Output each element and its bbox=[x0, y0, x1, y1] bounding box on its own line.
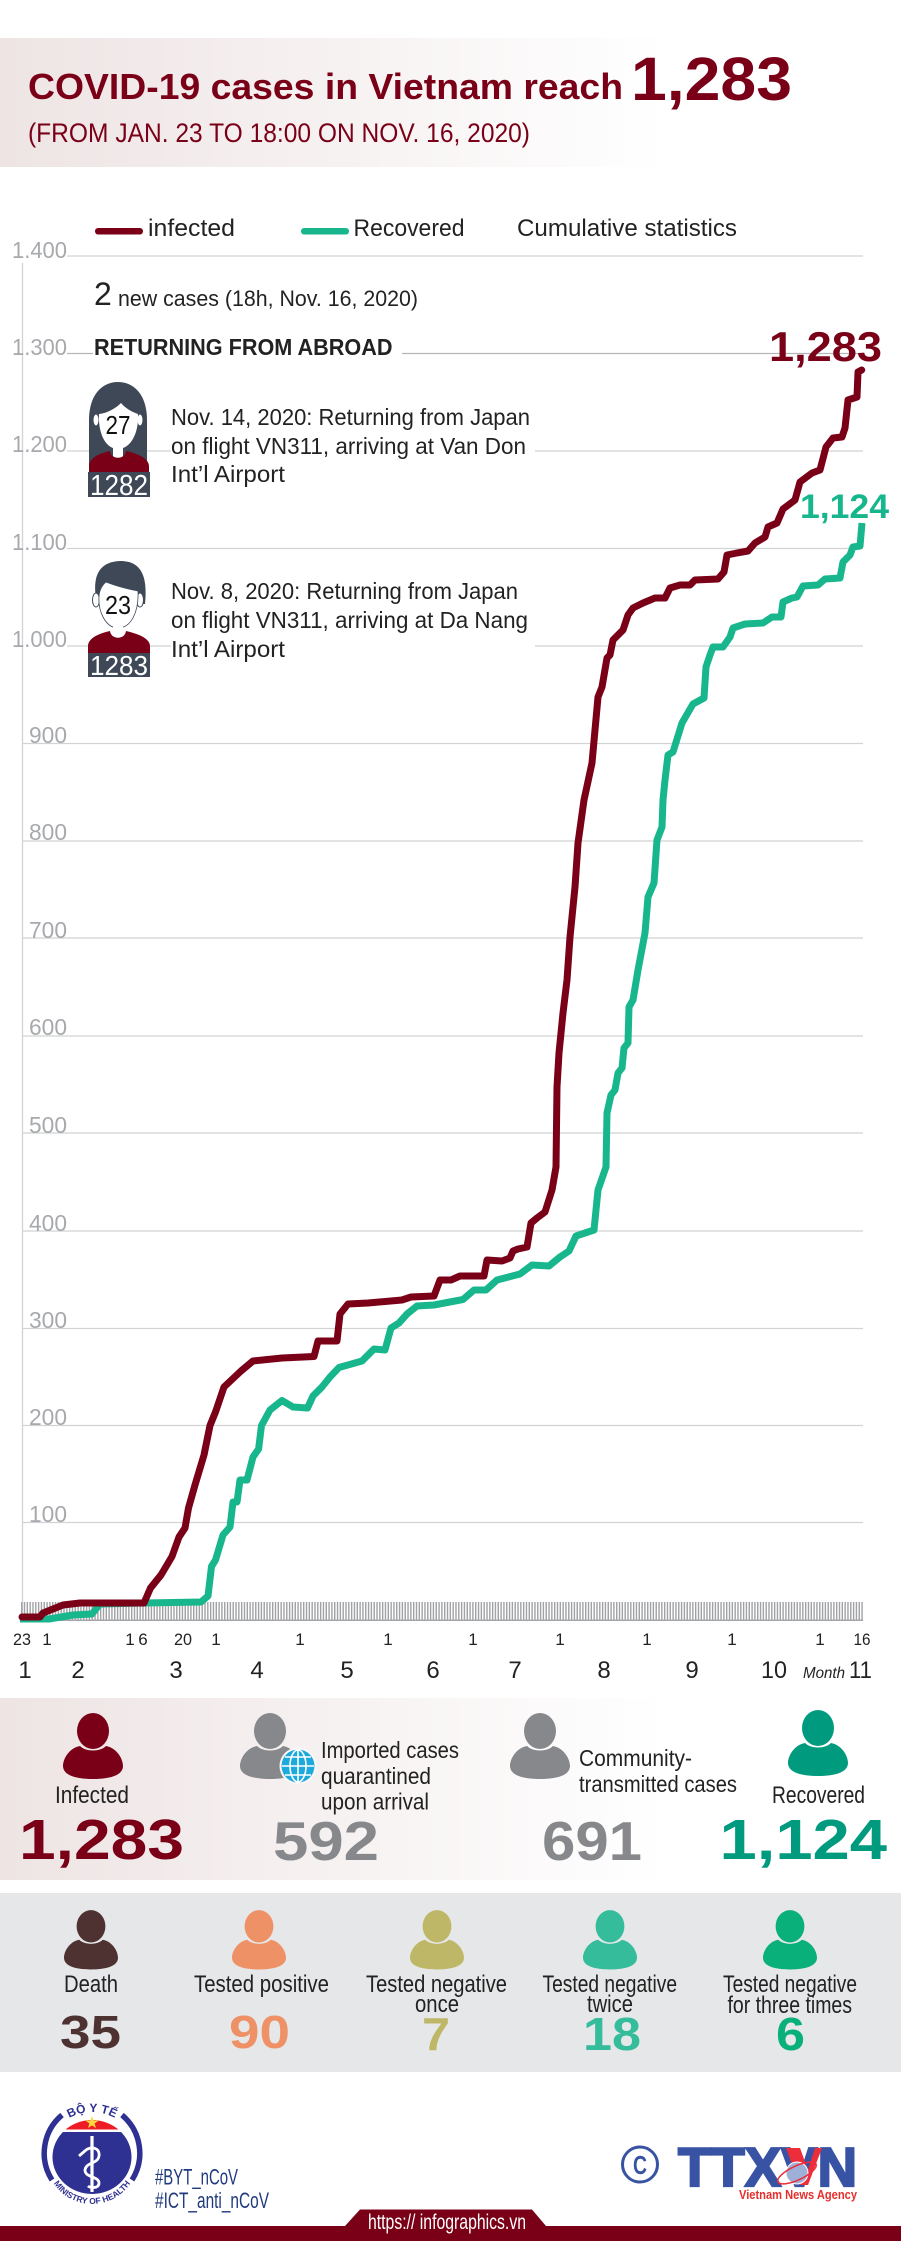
y axis labels: 600 bbox=[29, 1014, 67, 1040]
y axis labels: 500 bbox=[29, 1112, 67, 1138]
stat: tested negative twice: Tested negative bbox=[542, 1971, 677, 1998]
stat: tested negative once: once bbox=[415, 1991, 459, 2018]
hashtags: #ICT_anti_nCoV bbox=[155, 2188, 269, 2213]
section heading: returning from abroad: RETURNING FROM ABROAD bbox=[94, 334, 392, 360]
stat: tested negative three times: for three times bbox=[728, 1992, 852, 2019]
chart grid bbox=[22, 256, 863, 1620]
logo: TTXVN Vietnam News Agency: C bbox=[633, 2150, 647, 2180]
day tick labels: 20 bbox=[174, 1630, 192, 1649]
legend bbox=[95, 215, 737, 242]
day tick labels: 1 bbox=[642, 1630, 652, 1649]
stat: recovered: 1,124 bbox=[720, 1808, 887, 1872]
infected end value: 1,283 bbox=[769, 323, 882, 370]
y axis labels: 300 bbox=[29, 1307, 67, 1333]
y axis labels bbox=[12, 237, 67, 1527]
stat: infected: Infected bbox=[55, 1782, 129, 1809]
icon: patient 1283 bbox=[88, 561, 150, 681]
stat: imported cases: 592 bbox=[273, 1810, 379, 1872]
case 1283 description: Nov. 8, 2020: Returning from Japan bbox=[171, 578, 518, 604]
stat: imported cases: quarantined bbox=[321, 1763, 431, 1789]
stat: community cases: 691 bbox=[542, 1810, 642, 1872]
day tick labels: 1 bbox=[383, 1630, 393, 1649]
day tick labels: 1 bbox=[815, 1630, 825, 1649]
stat: tested negative once bbox=[366, 1910, 507, 2060]
icon: globe bbox=[280, 1748, 316, 1784]
y axis labels: 400 bbox=[29, 1210, 67, 1236]
legend: infected bbox=[148, 215, 235, 242]
hashtags: #BYT_nCoV bbox=[155, 2164, 238, 2190]
stat: recovered bbox=[720, 1710, 887, 1872]
day tick labels: 23 bbox=[13, 1630, 31, 1649]
stat: tested positive bbox=[194, 1910, 329, 2058]
y axis labels: 1.100 bbox=[12, 529, 67, 555]
y axis labels: 800 bbox=[29, 819, 67, 845]
month labels: Month bbox=[803, 1665, 845, 1682]
logo: Ministry of Health: MINISTRY OF HEALTH bbox=[54, 2180, 130, 2204]
stat: infected: 1,283 bbox=[19, 1808, 184, 1872]
stat: death: Death bbox=[64, 1971, 118, 1998]
header banner bbox=[0, 38, 901, 167]
title number: 1,283 bbox=[631, 45, 792, 113]
month labels: 11 bbox=[849, 1657, 872, 1684]
stat: imported cases: Imported cases bbox=[321, 1737, 459, 1763]
day tick labels bbox=[13, 1630, 870, 1649]
daily tick strip bbox=[21, 1602, 863, 1621]
month labels: 10 bbox=[761, 1657, 787, 1684]
stat: tested negative once: 7 bbox=[422, 2008, 450, 2060]
stat: tested negative twice bbox=[542, 1910, 677, 2060]
logo: Ministry of Health: BỘ Y TẾ bbox=[66, 2102, 119, 2118]
recovered line bbox=[20, 523, 862, 1619]
day tick labels: 16 bbox=[854, 1630, 870, 1649]
new cases note: 2 bbox=[94, 276, 112, 312]
day tick labels: 1 bbox=[42, 1630, 52, 1649]
stat: tested negative three times: Tested negative bbox=[723, 1971, 857, 1998]
panel: breakdown bbox=[0, 1893, 901, 2072]
month labels: 7 bbox=[508, 1657, 522, 1684]
footer bar: https:// infographics.vn bbox=[368, 2211, 526, 2234]
icon: patient 1283: 1283 bbox=[90, 650, 148, 681]
day tick labels: 1 bbox=[555, 1630, 565, 1649]
legend: Recovered bbox=[354, 215, 464, 242]
case 1283 description: on flight VN311, arriving at Da Nang bbox=[171, 607, 528, 633]
stat: imported cases bbox=[240, 1713, 459, 1872]
recovered end value: 1,124 bbox=[800, 488, 889, 526]
logo: TTXVN Vietnam News Agency: TTXVN bbox=[678, 2136, 857, 2198]
logo: Ministry of Health bbox=[41, 2102, 143, 2204]
logo: TTXVN Vietnam News Agency: Vietnam News Agency bbox=[739, 2187, 858, 2202]
new cases note bbox=[94, 276, 418, 312]
month labels: 8 bbox=[597, 1657, 611, 1684]
case 1283 description bbox=[171, 578, 528, 662]
y axis labels: 1.400 bbox=[12, 237, 67, 263]
icon: patient 1282 bbox=[88, 382, 150, 502]
stat: community cases bbox=[510, 1713, 737, 1872]
line chart bbox=[12, 237, 889, 1684]
y axis labels: 200 bbox=[29, 1404, 67, 1430]
icon: patient 1282: 27 bbox=[106, 410, 130, 440]
y axis labels: 1.300 bbox=[12, 334, 67, 360]
month labels: 1 bbox=[18, 1657, 32, 1684]
y axis labels: 100 bbox=[29, 1501, 67, 1527]
month labels: 6 bbox=[426, 1657, 440, 1684]
stat: tested negative twice: 18 bbox=[583, 2008, 641, 2060]
month labels: 3 bbox=[169, 1657, 183, 1684]
panel: main totals bbox=[0, 1698, 901, 1880]
stat: tested negative twice: twice bbox=[587, 1991, 633, 2018]
new cases note: new cases (18h, Nov. 16, 2020) bbox=[118, 286, 418, 311]
stat: imported cases: upon arrival bbox=[321, 1788, 429, 1814]
stat: recovered: Recovered bbox=[772, 1782, 865, 1809]
month labels: 4 bbox=[250, 1657, 264, 1684]
stat: tested negative once: Tested negative bbox=[366, 1971, 507, 1998]
y axis labels: 1.000 bbox=[12, 626, 67, 652]
day tick labels: 1 bbox=[468, 1630, 478, 1649]
day tick labels: 1 bbox=[125, 1630, 135, 1649]
legend: Cumulative statistics bbox=[517, 215, 737, 242]
month labels: 9 bbox=[685, 1657, 699, 1684]
day tick labels: 1 bbox=[295, 1630, 305, 1649]
day tick labels: 6 bbox=[138, 1630, 148, 1649]
title: COVID-19 cases in Vietnam reach bbox=[28, 66, 623, 107]
case 1282 description bbox=[171, 404, 530, 487]
month labels: 5 bbox=[340, 1657, 354, 1684]
day tick labels: 1 bbox=[211, 1630, 221, 1649]
icon: patient 1282: 1282 bbox=[90, 470, 148, 502]
stat: infected bbox=[19, 1713, 184, 1872]
stat: tested positive: 90 bbox=[229, 2006, 290, 2058]
stat: community cases: Community- bbox=[579, 1745, 692, 1771]
y axis labels: 700 bbox=[29, 917, 67, 943]
stat: tested negative three times: 6 bbox=[776, 2008, 805, 2060]
icon: patient 1283: 23 bbox=[105, 590, 131, 620]
subtitle: (FROM JAN. 23 TO 18:00 ON NOV. 16, 2020) bbox=[28, 118, 530, 148]
footer bar bbox=[0, 2210, 901, 2241]
case 1282 description: Int’l Airport bbox=[171, 461, 286, 487]
case 1283 description: Int’l Airport bbox=[171, 636, 286, 662]
case 1282 description: Nov. 14, 2020: Returning from Japan bbox=[171, 404, 530, 430]
stat: tested positive: Tested positive bbox=[194, 1971, 329, 1998]
case 1282 description: on flight VN311, arriving at Van Don bbox=[171, 433, 526, 459]
month labels: 2 bbox=[71, 1657, 85, 1684]
y axis labels: 900 bbox=[29, 722, 67, 748]
month labels bbox=[18, 1657, 872, 1684]
day tick labels: 1 bbox=[727, 1630, 737, 1649]
stat: community cases: transmitted cases bbox=[579, 1771, 737, 1797]
infected line bbox=[22, 370, 862, 1617]
stat: tested negative three times bbox=[723, 1910, 857, 2060]
hashtags bbox=[155, 2164, 269, 2213]
y axis labels: 1.200 bbox=[12, 431, 67, 457]
stat: death: 35 bbox=[60, 2006, 121, 2058]
stat: death bbox=[60, 1910, 121, 2058]
